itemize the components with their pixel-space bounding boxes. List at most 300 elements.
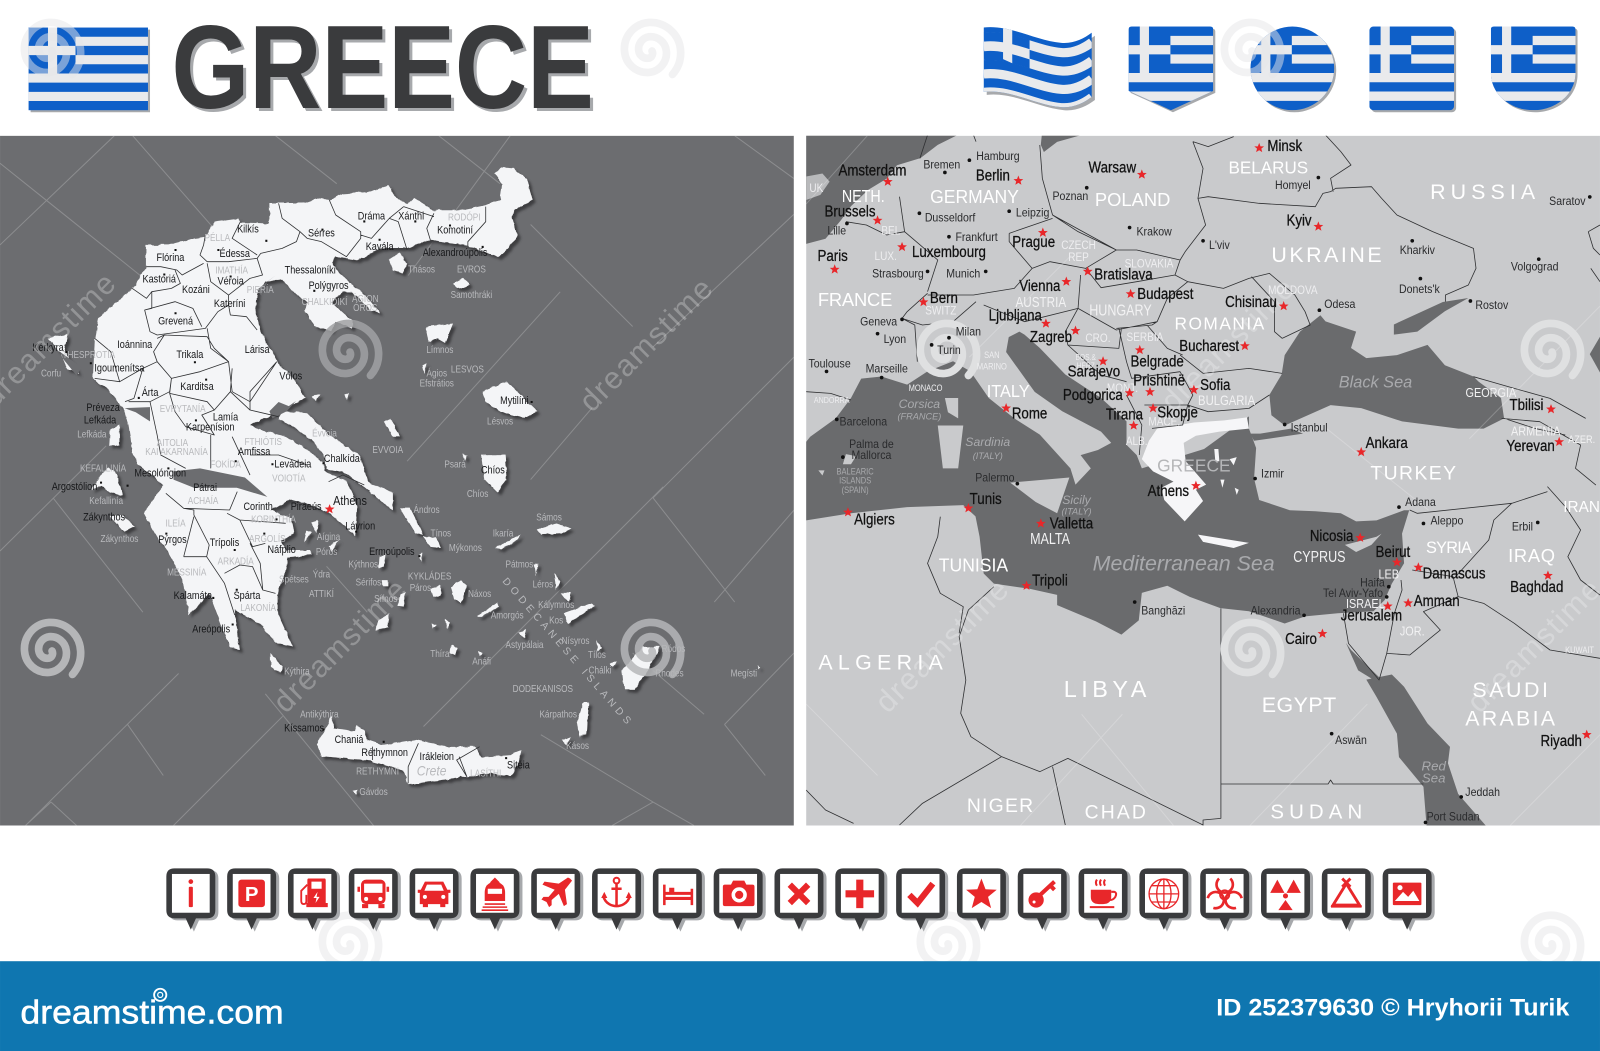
country borders south bbox=[806, 487, 1600, 826]
capital city labels: Yerevan bbox=[1506, 438, 1555, 455]
region and island labels of Greece: Ikaría bbox=[493, 528, 513, 539]
region and island labels of Greece: Lefkáda bbox=[77, 429, 106, 440]
secondary city labels: Banghāzi bbox=[1141, 605, 1185, 617]
icon: Athens capital star bbox=[325, 504, 334, 513]
region and island labels of Greece: KYKLÁDES bbox=[408, 571, 451, 582]
gulfs bbox=[60, 276, 296, 497]
city labels of Greece: Pátrai bbox=[193, 482, 217, 494]
icon pin: bus bbox=[349, 868, 401, 932]
region and island labels of Greece: Corfu bbox=[41, 368, 61, 379]
country labels small: BEL bbox=[881, 225, 900, 238]
region and island labels of Greece: Aígina bbox=[317, 531, 340, 542]
capital city labels: Valletta bbox=[1050, 516, 1093, 533]
country labels large: ALGERIA bbox=[818, 650, 944, 674]
secondary city labels: Strasbourg bbox=[872, 268, 924, 281]
footer logo: dreamstime.com bbox=[20, 994, 284, 1031]
capital city labels: Kyiv bbox=[1286, 213, 1312, 230]
main flag of Greece bbox=[29, 28, 150, 112]
shield flag bbox=[1491, 27, 1578, 112]
city labels of Greece: Areópolis bbox=[192, 624, 230, 636]
secondary city labels: Haifa bbox=[1360, 577, 1386, 590]
city labels of Greece: Chíos bbox=[481, 465, 505, 477]
secondary city labels: Mallorca bbox=[852, 450, 892, 462]
city labels of Greece: Corinth bbox=[243, 502, 273, 513]
secondary city labels: Barcelona bbox=[840, 416, 888, 429]
secondary city dots bbox=[825, 158, 1592, 824]
city labels of Greece: Xánthi bbox=[398, 211, 424, 223]
region and island labels of Greece: FTHIÓTIS bbox=[245, 436, 282, 447]
city labels of Greece: Náfplio bbox=[268, 544, 296, 556]
seas and islands italic labels: (ITALY) bbox=[973, 451, 1003, 461]
region and island labels of Greece: Mýkonos bbox=[449, 542, 482, 553]
country labels small: JOR. bbox=[1400, 624, 1425, 639]
waving flag bbox=[984, 27, 1095, 110]
region and island labels of Greece: Pátmos bbox=[505, 559, 534, 569]
city labels of Greece: Sérres bbox=[308, 228, 335, 240]
watermark lines and spirals: dreamstime bbox=[869, 573, 1015, 719]
secondary city labels: Izmir bbox=[1261, 468, 1284, 481]
country labels small: HERZ bbox=[1077, 361, 1095, 371]
country labels large: POLAND bbox=[1095, 189, 1170, 210]
city labels of Greece: Lefkáda bbox=[84, 415, 117, 427]
secondary city labels: Rostov bbox=[1475, 300, 1509, 312]
icon pin: information bbox=[166, 868, 218, 932]
capital city labels: Brussels bbox=[824, 204, 876, 221]
region and island labels of Greece: KAI AKARNANÍA bbox=[145, 446, 208, 457]
capital city labels: Amman bbox=[1414, 593, 1460, 610]
capital city labels: Tripoli bbox=[1032, 573, 1068, 590]
sea: baltic bbox=[1040, 136, 1080, 152]
secondary city labels: Jeddah bbox=[1465, 786, 1500, 799]
country labels small: CRO. bbox=[1085, 332, 1110, 345]
icon pin: anchor bbox=[592, 868, 644, 932]
secondary city labels: L'viv bbox=[1209, 240, 1230, 252]
city labels of Greece: Pýrgos bbox=[158, 534, 187, 546]
region and island labels of Greece: ILEÍA bbox=[165, 518, 186, 529]
region and island labels of Greece: Tílos bbox=[588, 650, 606, 660]
country labels small: MONT. bbox=[1107, 382, 1138, 395]
secondary city labels: Erbil bbox=[1512, 521, 1533, 534]
region and island labels of Greece: Ródos bbox=[662, 643, 686, 654]
country labels small: MARINO bbox=[977, 361, 1007, 372]
sea: north sea bbox=[806, 135, 958, 244]
country labels large: LIBYA bbox=[1064, 676, 1147, 702]
city labels of Greece: Kíssamos bbox=[284, 723, 324, 735]
country labels small: CYPRUS bbox=[1293, 548, 1346, 566]
city labels of Greece: Sitéia bbox=[507, 760, 530, 772]
city labels of Greece: Chalkída bbox=[324, 454, 360, 465]
seas and islands italic labels: (ITALY) bbox=[1061, 506, 1092, 516]
secondary city labels: Frankfurt bbox=[955, 231, 999, 244]
country labels small: AUSTRIA bbox=[1015, 294, 1066, 310]
title: GREECE bbox=[171, 2, 594, 134]
pentagon flag bbox=[1129, 27, 1215, 112]
region and island labels of Greece: Kárpathos bbox=[539, 709, 577, 719]
region and island labels of Greece: DODEKANISOS bbox=[513, 683, 573, 694]
region and island labels of Greece: Megísti bbox=[731, 668, 757, 679]
icon pin: biohazard bbox=[1200, 868, 1252, 932]
region and island labels of Greece: ACHAÍA bbox=[188, 495, 218, 506]
secondary city labels: Aleppo bbox=[1430, 515, 1463, 528]
icon pin: check bbox=[896, 868, 948, 932]
city labels of Greece: Kastoriá bbox=[143, 274, 176, 286]
country labels large: TUNISIA bbox=[939, 554, 1009, 575]
secondary city labels: Leipzig bbox=[1016, 207, 1049, 219]
city labels of Greece: Dráma bbox=[358, 211, 386, 223]
icon pin: airplane bbox=[531, 868, 583, 932]
region and island labels of Greece: Kásos bbox=[566, 740, 589, 751]
capital city labels: Bern bbox=[930, 290, 958, 307]
capital city labels: Skopje bbox=[1157, 405, 1198, 422]
capital city labels: Bucharest bbox=[1179, 338, 1239, 355]
city labels of Greece: Thessaloníki bbox=[285, 265, 336, 277]
watermark spirals and text: dreamstime bbox=[267, 573, 413, 719]
icon pin: coffee bbox=[1079, 868, 1131, 932]
region and island labels of Greece: Chálki bbox=[589, 665, 611, 676]
seas and islands italic labels: Corsica bbox=[899, 397, 940, 411]
region and island labels of Greece: EVRYTANÍA bbox=[160, 404, 206, 414]
region and island labels of Greece: RODÓPI bbox=[448, 212, 481, 223]
region and island labels of Greece: KORINTHÍA bbox=[251, 514, 296, 525]
secondary city labels: Odesa bbox=[1324, 299, 1356, 311]
capital city labels: Berlin bbox=[976, 168, 1010, 185]
land: UK bbox=[806, 173, 830, 200]
capital city labels: Nicosia bbox=[1310, 528, 1353, 545]
city labels of Greece: Trikala bbox=[176, 350, 204, 361]
city labels of Greece: Karditsa bbox=[180, 381, 214, 393]
secondary city labels: Munich bbox=[946, 268, 980, 281]
region and island labels of Greece: Ágios bbox=[426, 368, 448, 379]
region and island labels of Greece: CHALKIDIKÍ bbox=[302, 296, 348, 307]
region and island labels of Greece: Crete bbox=[417, 763, 446, 779]
icon pin: parking bbox=[227, 868, 279, 932]
city labels of Greece: Kozáni bbox=[182, 284, 210, 296]
icon pin: parking: P bbox=[245, 884, 258, 906]
secondary city labels: Palermo bbox=[975, 472, 1015, 485]
secondary city labels: Lyon bbox=[884, 333, 906, 346]
capital city labels: Beirut bbox=[1375, 544, 1410, 561]
region and island labels of Greece: Gávdos bbox=[359, 786, 388, 797]
secondary city labels: Port Sudan bbox=[1427, 811, 1479, 824]
region and island labels of Greece: AITOLIA bbox=[157, 437, 188, 448]
city labels of Greece: Édessa bbox=[220, 249, 250, 260]
capital city labels: Minsk bbox=[1267, 138, 1303, 155]
region and island labels of Greece: Ándros bbox=[414, 505, 440, 515]
region and island labels of Greece: ATTIKÍ bbox=[309, 588, 334, 599]
region and island labels of Greece: Tínos bbox=[431, 528, 452, 539]
watermark lines bbox=[0, 136, 794, 837]
country labels large: GERMANY bbox=[930, 186, 1019, 207]
region and island labels of Greece: DODECANESE ISLANDS bbox=[500, 576, 633, 727]
city labels of Greece: Grevená bbox=[158, 316, 193, 328]
country labels large: CHAD bbox=[1085, 801, 1146, 823]
region and island labels of Greece: Kefallinía bbox=[89, 495, 123, 506]
region and island labels of Greece: THESPROTÍA bbox=[62, 350, 115, 360]
capital city labels bbox=[817, 138, 1582, 750]
secondary city labels: Alexandria bbox=[1251, 605, 1301, 617]
land: mainland Greece bbox=[48, 167, 760, 795]
secondary city labels: Istanbul bbox=[1291, 422, 1328, 435]
icon pin: picture bbox=[1383, 868, 1435, 932]
city labels of Greece: Mesolóngion bbox=[134, 468, 186, 480]
country labels large: SAUDI bbox=[1472, 678, 1548, 702]
capital city stars bbox=[830, 143, 1592, 739]
region and island labels of Greece: Kýthira bbox=[284, 666, 310, 677]
city labels of Greece: Komotiní bbox=[437, 225, 473, 237]
country labels large: ROMANIA bbox=[1174, 314, 1265, 334]
region and island labels of Greece: Thásos bbox=[408, 264, 435, 275]
island: Evvoia bbox=[279, 411, 393, 510]
city labels of Greece: Ioánnina bbox=[117, 339, 153, 351]
capital city labels: Sarajevo bbox=[1068, 364, 1120, 381]
country labels large: NIGER bbox=[967, 795, 1033, 817]
region and island labels of Greece: Spétses bbox=[279, 574, 309, 585]
country labels large: ITALY bbox=[987, 381, 1030, 401]
country labels small: LUX. bbox=[875, 250, 897, 263]
icon pin: tent bbox=[1322, 868, 1374, 932]
country labels large: FRANCE bbox=[818, 289, 892, 310]
region and island labels of Greece: Rhodes bbox=[655, 668, 684, 679]
city labels of Greece: Athens bbox=[333, 493, 367, 508]
region and island labels of Greece: Kálymnos bbox=[538, 600, 575, 610]
city labels of Greece: Véroia bbox=[218, 276, 244, 288]
region and island labels of Greece: IMATHÍA bbox=[215, 265, 248, 276]
icon pin: cross mark bbox=[774, 868, 827, 932]
city labels of Greece: Mytilíni bbox=[500, 395, 528, 407]
city labels of Greece: Irákleion bbox=[420, 752, 454, 763]
secondary city labels: Lille bbox=[827, 225, 846, 238]
city labels of Greece: Préveza bbox=[86, 403, 120, 414]
country labels small: HUNGARY bbox=[1089, 301, 1152, 319]
region and island labels of Greece: LAKONÍA bbox=[240, 603, 276, 613]
secondary city labels: Poznan bbox=[1053, 191, 1088, 203]
region and island labels of Greece: LASÍTHI bbox=[470, 768, 501, 779]
icon pin: bed bbox=[653, 868, 705, 932]
capital city labels: Chisinau bbox=[1225, 294, 1277, 311]
region and island labels of Greece: Amorgós bbox=[491, 610, 524, 621]
city labels of Greece: Árta bbox=[142, 387, 159, 399]
region and island labels of Greece: Psará bbox=[444, 459, 466, 469]
country labels small: (SPAIN) bbox=[842, 484, 869, 495]
icon pin: plus bbox=[835, 868, 887, 932]
watermark spirals and text: dreamstime bbox=[573, 272, 719, 418]
city labels of Greece: Lárisa bbox=[245, 344, 270, 356]
region and island labels of Greece: ÓROS bbox=[353, 303, 377, 313]
secondary city labels bbox=[808, 151, 1586, 824]
region and island labels of Greece: Efstrátios bbox=[420, 378, 454, 389]
icon pin: globe bbox=[1139, 868, 1191, 932]
capital city labels: Vienna bbox=[1019, 278, 1060, 295]
region and island labels of Greece: Zákynthos bbox=[100, 533, 139, 544]
country labels small: ISLANDS bbox=[839, 475, 872, 486]
region and island labels of Greece: Lésvos bbox=[487, 416, 514, 427]
country labels large bbox=[818, 157, 1600, 823]
land: Greece bbox=[1142, 417, 1249, 548]
country labels small: KUWAIT bbox=[1565, 644, 1594, 655]
city labels of Greece: Lávrion bbox=[345, 521, 375, 533]
city labels of Greece: Piraeús bbox=[291, 502, 322, 513]
country labels large: SYRIA bbox=[1426, 539, 1472, 557]
country labels small: BULGARIA bbox=[1198, 393, 1256, 408]
secondary city labels: Palma de bbox=[849, 438, 894, 451]
capital city labels: Prishtinë bbox=[1133, 373, 1185, 390]
city labels of Greece: Trípolis bbox=[210, 537, 239, 549]
region and island labels of Greece: Astypálaia bbox=[506, 639, 543, 650]
secondary city labels: Adana bbox=[1405, 497, 1436, 509]
country labels small: UK bbox=[809, 182, 824, 195]
secondary city labels: Krakow bbox=[1137, 226, 1173, 239]
secondary city labels: Saratov bbox=[1549, 196, 1586, 208]
region and island labels of Greece bbox=[41, 212, 757, 797]
region and island labels of Greece: Anáfi bbox=[472, 656, 491, 666]
islands bbox=[48, 253, 760, 795]
watermark spirals and text bbox=[0, 267, 719, 719]
city labels of Greece: Igoumenítsa bbox=[94, 363, 145, 375]
region and island labels of Greece: PÉLLA bbox=[205, 232, 230, 243]
secondary city labels: Kharkiv bbox=[1400, 245, 1435, 257]
country labels large: IRAN bbox=[1563, 499, 1600, 516]
footer credit: ID 252379630 © Hryhorii Turik bbox=[1216, 994, 1570, 1021]
capital city labels: Tirana bbox=[1106, 407, 1143, 424]
administrative borders bbox=[95, 200, 486, 485]
seas and islands italic labels: Mediterranean Sea bbox=[1093, 551, 1275, 575]
region and island labels of Greece: LESVOS bbox=[451, 364, 484, 375]
city labels of Greece: Kavála bbox=[366, 241, 394, 253]
square flag bbox=[1369, 27, 1456, 112]
city labels of Greece: Ermoúpolis bbox=[369, 546, 415, 558]
secondary city labels: Milan bbox=[956, 326, 981, 339]
capital city labels: Budapest bbox=[1137, 286, 1193, 303]
city labels of Greece: Kateríni bbox=[214, 299, 245, 310]
panel: map of Greece bbox=[0, 136, 794, 837]
region and island labels of Greece: VOIOTÍA bbox=[272, 473, 305, 484]
secondary city labels: Dusseldorf bbox=[925, 212, 976, 225]
capital city labels: Prague bbox=[1012, 234, 1055, 251]
seas and islands italic labels bbox=[897, 374, 1446, 786]
country labels large: GREECE bbox=[1157, 455, 1231, 475]
country labels large: IRAQ bbox=[1508, 545, 1555, 566]
secondary city labels: Aswān bbox=[1335, 734, 1367, 747]
sea: Black Sea bbox=[1269, 315, 1504, 429]
region and island labels of Greece: EVVOIA bbox=[372, 444, 403, 455]
sea: Azov bbox=[1394, 298, 1468, 335]
seas and islands italic labels: Sicily bbox=[1062, 493, 1092, 507]
country labels small: GEORGIA bbox=[1466, 385, 1517, 400]
country labels large: TURKEY bbox=[1370, 463, 1456, 485]
country labels large: NETH. bbox=[842, 186, 885, 206]
sea: mediterranean bbox=[806, 332, 1409, 635]
country labels small: MOLDOVA bbox=[1268, 284, 1318, 297]
panel: regional map bbox=[806, 135, 1600, 826]
region and island labels of Greece: Páros bbox=[410, 582, 432, 593]
capital city labels: Baghdad bbox=[1510, 579, 1563, 596]
capital city labels: Jerusalem bbox=[1341, 608, 1402, 625]
round flag bbox=[1250, 27, 1336, 112]
capital city labels: Cairo bbox=[1285, 631, 1317, 648]
icon pin: fuel bbox=[288, 868, 340, 932]
secondary city labels: Toulouse bbox=[808, 358, 851, 370]
city labels of Greece bbox=[32, 211, 530, 772]
region and island labels of Greece: KEFALLINÍA bbox=[80, 463, 126, 474]
secondary city labels: Bremen bbox=[923, 159, 960, 172]
city labels of Greece: Flórina bbox=[157, 253, 185, 264]
secondary city labels: Homyel bbox=[1275, 179, 1311, 192]
secondary city labels: Tel Aviv-Yafo bbox=[1323, 587, 1383, 600]
region and island labels of Greece: Antikýthira bbox=[300, 709, 339, 719]
region and island labels of Greece: Chíos bbox=[467, 488, 489, 499]
city labels of Greece: Levádeia bbox=[274, 459, 312, 471]
region and island labels of Greece: Évvoia bbox=[312, 428, 337, 439]
region and island labels of Greece: PIERÍA bbox=[247, 284, 274, 295]
country labels large: BELARUS bbox=[1229, 157, 1308, 177]
country labels small: SERBIA bbox=[1127, 331, 1164, 344]
country labels small: SAN bbox=[984, 349, 1000, 360]
title: GREECE bbox=[175, 5, 597, 137]
country labels small: LEB bbox=[1378, 567, 1399, 582]
sea: Gulf of Suez bbox=[1346, 643, 1379, 678]
secondary city labels: Volgograd bbox=[1511, 261, 1558, 274]
seas and islands italic labels: Sea bbox=[1422, 771, 1445, 786]
capital city labels: Bratislava bbox=[1094, 267, 1153, 284]
country labels large: EGYPT bbox=[1262, 693, 1336, 717]
city labels of Greece: Kilkís bbox=[237, 224, 259, 236]
icon pin: radiation bbox=[1261, 868, 1313, 932]
city labels of Greece: Polýgyros bbox=[309, 280, 349, 292]
seas and islands italic labels: (FRANCE) bbox=[897, 411, 941, 421]
country labels small bbox=[809, 182, 1595, 655]
country labels small: MALTA bbox=[1030, 530, 1071, 547]
country borders north bbox=[806, 135, 1600, 485]
region and island labels of Greece: Léros bbox=[533, 579, 554, 590]
icon pin: camera bbox=[714, 868, 766, 932]
country labels small: SLOVAKIA bbox=[1125, 257, 1174, 271]
seas and islands italic labels: Black Sea bbox=[1339, 374, 1412, 392]
secondary city labels: Donets'k bbox=[1399, 283, 1440, 296]
city labels of Greece: Spárta bbox=[234, 590, 261, 602]
region and island labels of Greece: Samothráki bbox=[451, 289, 492, 300]
capital city labels: Paris bbox=[817, 248, 848, 265]
land: Italy bbox=[953, 327, 1111, 485]
region and island labels of Greece: ARGOLÍS bbox=[249, 533, 286, 544]
country labels small: CZECH bbox=[1061, 239, 1096, 252]
city labels of Greece: Karpenísion bbox=[186, 422, 235, 434]
icon pin: car bbox=[410, 868, 462, 932]
region and island labels of Greece: Kýthnos bbox=[348, 559, 379, 569]
region and island labels of Greece: EVROS bbox=[457, 264, 486, 275]
capital city labels: Sofia bbox=[1200, 377, 1230, 394]
city labels of Greece: Argostólion bbox=[52, 481, 97, 493]
city labels of Greece: Kérkyra bbox=[32, 342, 64, 354]
region and island labels of Greece: Kos bbox=[549, 615, 564, 626]
region and island labels of Greece: Nísyros bbox=[562, 635, 590, 646]
capital city labels: Athens bbox=[1148, 483, 1189, 500]
region and island labels of Greece: Ýdra bbox=[313, 569, 330, 580]
capital city labels: Ankara bbox=[1366, 435, 1408, 452]
capital city labels: Tbilisi bbox=[1510, 397, 1544, 414]
islands in the mediterranean bbox=[818, 398, 1382, 552]
capital city labels: Luxembourg bbox=[912, 244, 986, 261]
region and island labels of Greece: Póros bbox=[316, 546, 338, 557]
region and island labels of Greece: MESSINÍA bbox=[167, 567, 206, 578]
region and island labels of Greece: Thíra bbox=[430, 649, 449, 659]
country labels small: MONACO bbox=[909, 382, 943, 393]
country labels large: UKRAINE bbox=[1271, 243, 1382, 267]
city labels of Greece: Kalamáta bbox=[174, 590, 213, 602]
secondary city labels: Geneva bbox=[860, 316, 898, 329]
region and island labels of Greece: Sífnos bbox=[374, 593, 398, 604]
country labels small: SWITZ bbox=[925, 304, 957, 318]
icon row bbox=[166, 868, 1435, 932]
